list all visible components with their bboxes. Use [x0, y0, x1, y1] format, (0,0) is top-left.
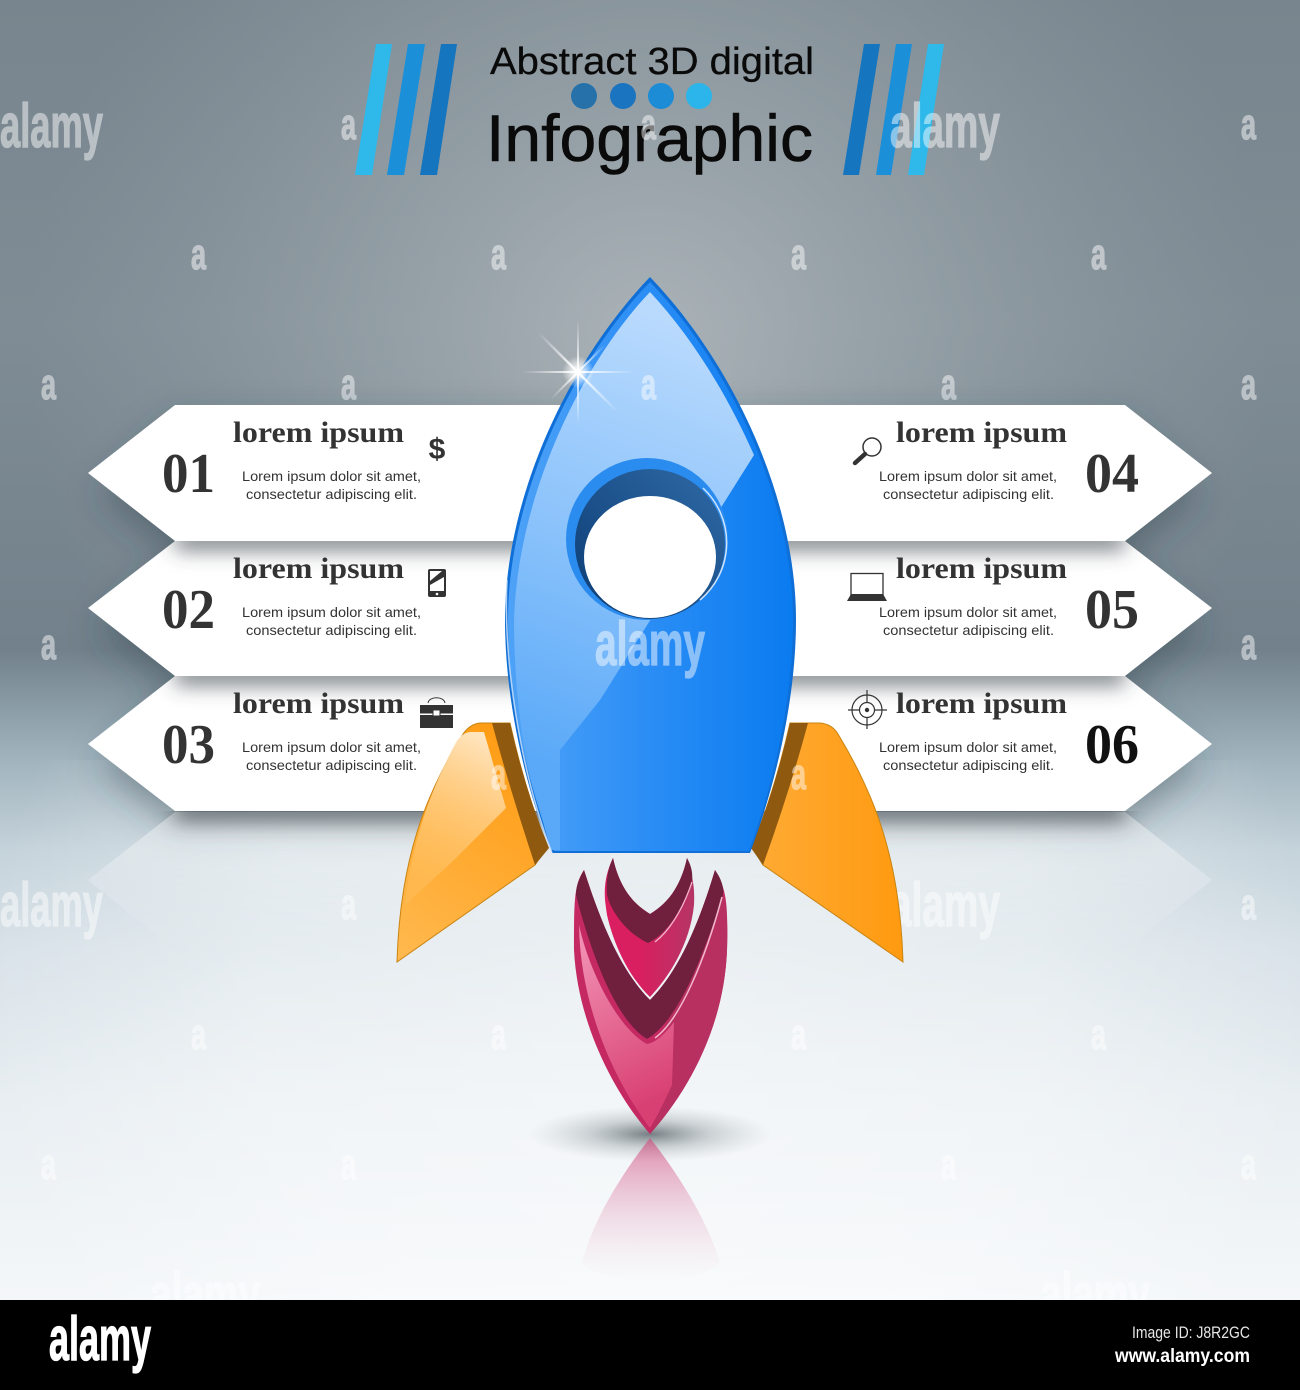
panel: banner 01: consectetur adipiscing elit. — [246, 486, 417, 502]
watermark: alamy pattern on backdrop: a — [1241, 1140, 1256, 1189]
flame reflection — [582, 1138, 720, 1280]
panel: banner 03 — [88, 676, 537, 811]
watermark: alamy on rocket: a — [791, 750, 806, 799]
title — [486, 41, 814, 175]
panel: banner 01: 01 — [162, 443, 215, 505]
watermark: alamy pattern on backdrop: a — [41, 620, 56, 669]
flame — [574, 858, 727, 1134]
watermark: alamy on rocket — [491, 360, 806, 799]
watermark: alamy pattern on backdrop: a — [1241, 620, 1256, 669]
banner drop shadows on backdrop — [100, 420, 1200, 825]
watermark: alamy on rocket: a — [491, 750, 506, 799]
watermark: alamy pattern on backdrop: a — [791, 230, 806, 279]
panel: banner 02: 02 — [162, 579, 215, 641]
panel: banner 01: Lorem ipsum dolor sit amet, — [242, 468, 421, 484]
panel: banner 06: lorem ipsum — [896, 687, 1067, 720]
title dots — [571, 83, 712, 109]
watermark: alamy pattern on backdrop: a — [1241, 360, 1256, 409]
rocket window — [566, 458, 728, 620]
right fin — [751, 723, 903, 962]
panel: banner 02: Lorem ipsum dolor sit amet, — [242, 604, 421, 620]
panel: banner 02: lorem ipsum — [233, 552, 404, 585]
panel: banner 03: Lorem ipsum dolor sit amet, — [242, 739, 421, 755]
title stripes right — [843, 44, 944, 175]
watermark: alamy pattern on backdrop: a — [191, 230, 206, 279]
panel: banner 02 — [88, 541, 513, 676]
panel: banner 04: Lorem ipsum dolor sit amet, — [879, 468, 1057, 484]
watermark: alamy pattern on backdrop: a — [191, 1010, 206, 1059]
title: Abstract 3D digital — [490, 41, 814, 83]
sparkle on rocket — [522, 320, 634, 425]
title: Infographic — [486, 101, 813, 175]
watermark: alamy pattern on backdrop: a — [1241, 880, 1256, 929]
watermark: alamy pattern on backdrop: a — [341, 1140, 356, 1189]
panel: banner 06: 06 — [1085, 714, 1139, 776]
panel: banner 05 — [788, 541, 1212, 676]
watermark: alamy pattern on backdrop: alamy — [890, 871, 1000, 940]
panel: banner 04: 04 — [1085, 443, 1139, 505]
watermark: alamy pattern on backdrop: a — [791, 1010, 806, 1059]
title stripes left — [355, 44, 457, 175]
watermark: alamy pattern on backdrop: a — [941, 360, 956, 409]
watermark: alamy pattern on backdrop: alamy — [1040, 1261, 1150, 1330]
watermark: alamy pattern on backdrop: a — [941, 1140, 956, 1189]
watermark: alamy on rocket: alamy — [595, 610, 705, 679]
panel: banner 03: consectetur adipiscing elit. — [246, 757, 417, 773]
left fin — [397, 723, 549, 962]
watermark: alamy pattern on backdrop: a — [1091, 230, 1106, 279]
panel: banner 01: $ — [429, 433, 446, 466]
watermark: alamy pattern on backdrop: alamy — [0, 92, 103, 161]
shadow under bottom banners — [175, 800, 1125, 820]
panel: banner 06: Lorem ipsum dolor sit amet, — [879, 739, 1057, 755]
watermark: alamy pattern on backdrop: a — [41, 1140, 56, 1189]
panel: banner 01 — [88, 405, 640, 541]
watermark: alamy pattern on backdrop: a — [341, 880, 356, 929]
watermark: alamy pattern on backdrop: a — [1091, 1010, 1106, 1059]
panel: banner 05: lorem ipsum — [896, 552, 1067, 585]
panel: banner 05: Lorem ipsum dolor sit amet, — [879, 604, 1057, 620]
panel: banner 01: lorem ipsum — [233, 416, 404, 449]
panel: banner 06: consectetur adipiscing elit. — [883, 757, 1054, 773]
watermark: alamy on rocket: a — [641, 360, 656, 409]
watermark: alamy pattern on backdrop: alamy — [890, 92, 1000, 161]
panel: banner 03: 03 — [162, 714, 215, 776]
footer logo: alamy — [49, 1305, 151, 1374]
watermark: alamy pattern on backdrop: a — [341, 360, 356, 409]
panel: banner 05: 05 — [1085, 579, 1139, 641]
watermark: alamy pattern on backdrop: a — [641, 100, 656, 149]
watermark: alamy pattern on backdrop: a — [491, 230, 506, 279]
panel: banner 05: consectetur adipiscing elit. — [883, 622, 1054, 638]
rocket shadow on floor — [528, 1106, 772, 1162]
panel: banner 04: lorem ipsum — [896, 416, 1067, 449]
watermark: alamy pattern on backdrop: a — [491, 1010, 506, 1059]
panel: banner 04: consectetur adipiscing elit. — [883, 486, 1054, 502]
panel: banner 04 — [660, 405, 1212, 541]
website: www.alamy.com — [1114, 1346, 1250, 1367]
watermark: alamy pattern on backdrop: alamy — [0, 871, 103, 940]
image id: Image ID: J8R2GC — [1132, 1323, 1250, 1342]
panel: banner 03: lorem ipsum — [233, 687, 404, 720]
footer bar — [0, 1300, 1300, 1390]
watermark: alamy pattern on backdrop: alamy — [150, 1261, 260, 1330]
watermark: alamy pattern on backdrop: a — [41, 360, 56, 409]
banner reflections on floor — [88, 812, 1212, 950]
panel: banner 06 — [764, 676, 1212, 811]
watermark: alamy pattern on backdrop: a — [341, 100, 356, 149]
panel: banner 02: consectetur adipiscing elit. — [246, 622, 417, 638]
watermark: alamy pattern on backdrop: a — [1241, 100, 1256, 149]
rocket body — [505, 277, 796, 853]
